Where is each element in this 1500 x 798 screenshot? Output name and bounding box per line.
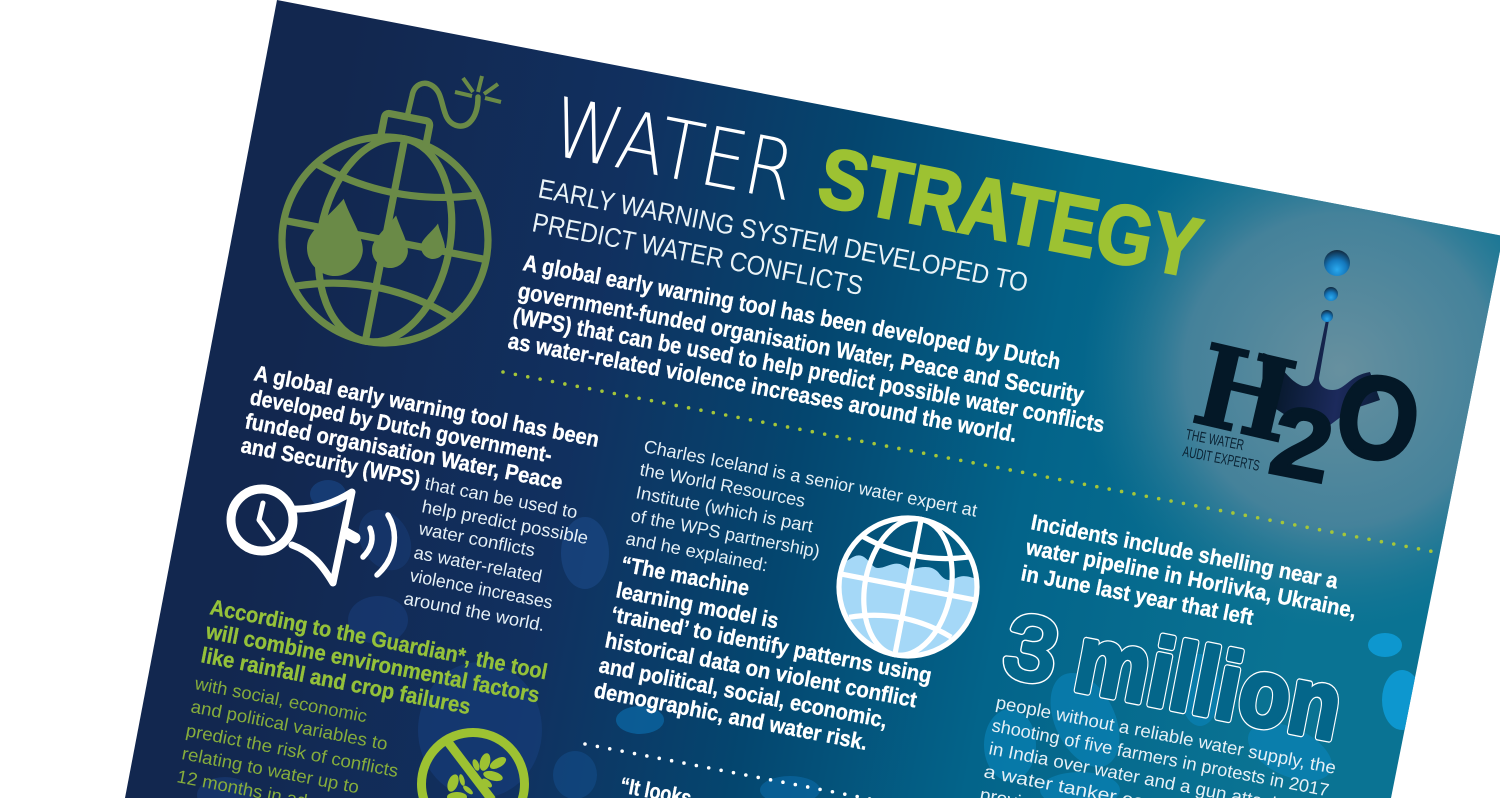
statistic: 3 million: million	[1067, 605, 1350, 761]
logo: H2O The Water Audit Experts	[1181, 250, 1431, 505]
panel: middle column text: Institute (which is part	[634, 482, 815, 536]
logo: H2O The Water Audit Experts: O	[1325, 346, 1431, 491]
panel: middle column text: demographic, and water risk.	[592, 677, 870, 755]
intro paragraph: (WPS) that can be used to help predict possible water conflicts	[511, 302, 1107, 437]
panel: middle column text: and political, social, economic,	[597, 652, 889, 733]
panel: middle column text: and he explained:	[624, 528, 769, 575]
panel: middle column text: “The machine	[619, 551, 751, 601]
intro paragraph: as water-related violence increases around the world.	[506, 327, 1019, 447]
panel: left column text: help predict possible	[420, 496, 590, 548]
intro paragraph	[506, 249, 1107, 447]
title: STRATEGY	[812, 129, 1208, 295]
logo: H2O The Water Audit Experts: THE WATER	[1184, 426, 1246, 454]
logo: H2O The Water Audit Experts: H	[1183, 320, 1306, 469]
subtitle: EARLY WARNING SYSTEM DEVELOPED TO	[536, 173, 1030, 298]
logo: H2O The Water Audit Experts: AUDIT EXPERTS	[1181, 443, 1261, 475]
panel: left column green text: relating to water up to	[180, 743, 361, 797]
panel: left column green text	[175, 594, 550, 798]
title	[544, 80, 1208, 295]
panel: left column green text: with social, economic	[192, 673, 369, 726]
panel: left column green text: like rainfall and crop failures	[199, 642, 473, 719]
panel: middle column text: Charles Iceland is a senior water expert at	[642, 436, 979, 521]
panel: middle column text: ‘trained’ to identify patterns using	[609, 601, 934, 688]
intro paragraph: A global early warning tool has been developed by Dutch	[521, 249, 1063, 374]
panel: left column text: funded organisation Water, Peace	[243, 408, 565, 495]
panel: left column text: A global early warning tool has been	[252, 360, 601, 452]
panel: right column body text: shooting of five farmers in protests in 2017	[990, 715, 1331, 798]
panel: left column text: around the world.	[402, 588, 546, 635]
statistic: 3 million: million	[1067, 605, 1350, 761]
panel: middle column text: historical data on violent conflict	[603, 627, 920, 713]
panel: middle column text: of the WPS partnership)	[629, 505, 822, 562]
panel: middle column text: the World Resources	[638, 459, 807, 511]
panel: right column heading: water pipeline in Horlivka, Ukraine,	[1023, 534, 1359, 623]
panel: left column green text: predict the risk of conflicts	[184, 720, 400, 781]
panel: left column green text: According to the Guardian*, the tool	[208, 594, 550, 684]
icon: crossed-out crop	[422, 732, 524, 798]
statistic: 3 million	[996, 595, 1350, 761]
panel: left column text: that can be used to	[423, 473, 579, 523]
panel: right column body text: people without a reliable water supply, the	[994, 692, 1338, 778]
divider: white dotted line	[585, 744, 870, 798]
icon: clock megaphone	[231, 489, 394, 583]
panel: left column text: developed by Dutch government-	[248, 384, 554, 467]
panel: left column text	[239, 360, 601, 635]
divider: green dotted line	[503, 372, 1435, 552]
panel: left column green text: will combine environmental factors	[203, 618, 542, 708]
panel: left column text: water conflicts	[416, 518, 537, 560]
logo: H2O The Water Audit Experts: 2	[1262, 384, 1342, 505]
title: WATER	[544, 80, 803, 220]
panel: left column text: and Security (WPS)	[239, 432, 422, 492]
panel: middle column text	[592, 436, 979, 798]
panel: right column heading: Incidents include shelling near a	[1029, 509, 1341, 594]
panel: right column heading: in June last year that left	[1019, 560, 1256, 630]
statistic: 3 million: 3	[996, 595, 1066, 704]
statistic: 3 million: 3	[996, 595, 1066, 704]
intro paragraph: government-funded organisation Water, Peace and Security	[516, 277, 1086, 408]
panel: left column text: as water-related	[412, 542, 544, 587]
panel: middle column text: learning model is	[614, 577, 781, 633]
panel: left column text: violence increases	[408, 565, 554, 613]
icon: bomb globe with water drops	[264, 76, 510, 361]
icon: globe with water	[836, 515, 980, 659]
panel: left column green text: and political variables to	[189, 696, 389, 754]
subtitle: PREDICT WATER CONFLICTS	[530, 207, 865, 301]
